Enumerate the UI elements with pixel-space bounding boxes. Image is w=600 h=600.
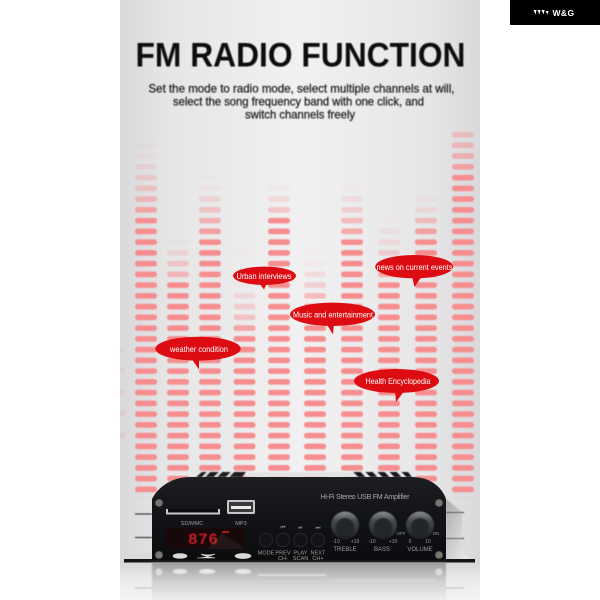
- LED display: [165, 528, 245, 549]
- port labels: SD/MMC: [181, 521, 203, 527]
- knob labels: -10: [368, 539, 376, 545]
- knob labels: -10: [332, 539, 340, 545]
- callout: news on current events: [375, 255, 453, 287]
- logo badge: W&G: W&G: [552, 8, 574, 18]
- subtitle text block: switch channels freely: [245, 108, 355, 122]
- control knobs: [331, 512, 434, 540]
- callout: Music and entertainment: [290, 303, 375, 334]
- front panel body: [152, 477, 446, 560]
- knob labels: BASS: [374, 547, 390, 553]
- playback buttons: PREV: [275, 550, 291, 556]
- knob labels: ON: [433, 531, 439, 536]
- callout: Urban interviews: Urban interviews: [236, 271, 292, 281]
- USB port: [227, 500, 255, 514]
- SD card slot: [166, 509, 220, 514]
- callout: weather condition: weather condition: [169, 344, 228, 354]
- knob labels: VOLUME: [407, 547, 433, 553]
- heat sink fins: [127, 472, 470, 559]
- playback buttons: MODE: [258, 550, 275, 556]
- amplifier device: [124, 472, 475, 562]
- base plate: [124, 559, 475, 562]
- knob labels: OFF: [396, 531, 406, 536]
- chart: red equalizer bars: [120, 132, 474, 497]
- panel screws: [155, 499, 443, 559]
- knob labels: +10: [389, 539, 397, 545]
- subtitle text block: [148, 82, 454, 122]
- port labels: [181, 521, 247, 527]
- playback buttons: SCAN: [293, 556, 308, 562]
- subtitle text block: select the song frequency band with one click, and: [173, 94, 424, 108]
- LED display: 876: [188, 531, 218, 549]
- model label: Hi-Fi Stereo USB FM Amplifier: [320, 492, 410, 501]
- playback buttons: [258, 525, 326, 562]
- playback buttons: CH+: [312, 556, 324, 562]
- panel: grey backdrop: [120, 0, 480, 600]
- playback buttons: PLAY: [294, 550, 308, 556]
- knob labels: 10: [425, 539, 431, 545]
- playback buttons: ⏯: [298, 525, 303, 531]
- callout: weather condition: [155, 337, 241, 370]
- port labels: MP3: [235, 521, 247, 527]
- playback buttons: CH-: [278, 556, 288, 562]
- callout: news on current events: news on current events: [376, 262, 452, 272]
- logo badge: W&G: [510, 0, 600, 25]
- callout: Urban interviews: [233, 267, 296, 290]
- knob labels: [332, 531, 439, 553]
- knob labels: +10: [351, 539, 359, 545]
- playback buttons: NEXT: [311, 550, 326, 556]
- callout: Health Encyclopedia: Health Encyclopedia: [366, 376, 431, 386]
- playback buttons: ⏮: [280, 525, 286, 531]
- device reflection: [135, 562, 464, 600]
- reflective floor: [120, 562, 480, 600]
- format logos: [173, 553, 251, 559]
- title: FM RADIO FUNCTION: [136, 36, 466, 74]
- knob labels: 0: [409, 539, 412, 545]
- callout: Music and entertainment: Music and entertainment: [293, 310, 374, 320]
- playback buttons: ⏭: [315, 525, 321, 531]
- knob labels: TREBLE: [333, 547, 357, 553]
- callout: Health Encyclopedia: [354, 369, 439, 402]
- subtitle text block: Set the mode to radio mode, select multiple channels at will,: [148, 82, 454, 96]
